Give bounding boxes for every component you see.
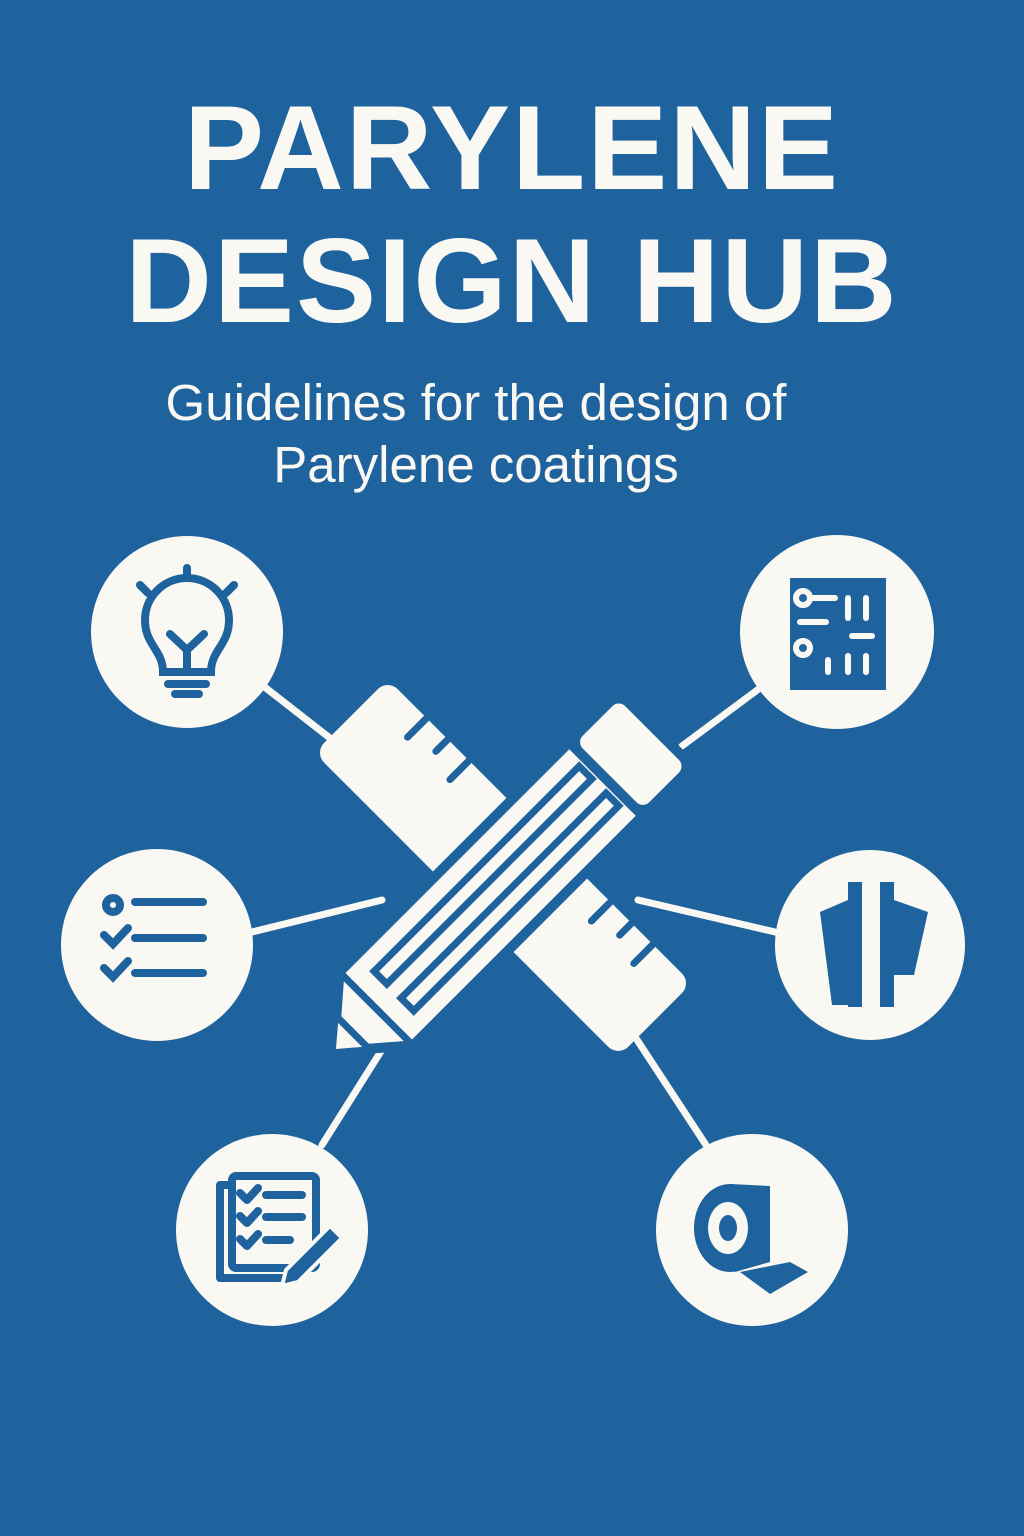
icon: circuit board <box>740 535 934 729</box>
icon: checklist <box>61 849 253 1041</box>
title <box>125 81 899 348</box>
subtitle: Parylene coatings <box>273 436 679 493</box>
icon: tape roll <box>656 1134 848 1326</box>
title: DESIGN HUB <box>125 214 899 348</box>
subtitle: Guidelines for the design of <box>166 374 786 431</box>
icon: document with pencil <box>176 1134 368 1326</box>
connector lines <box>252 685 775 1145</box>
icon: lightbulb <box>91 536 283 728</box>
icon: pencil <box>297 693 692 1088</box>
title: PARYLENE <box>184 81 840 215</box>
subtitle <box>166 374 786 493</box>
icon: caliper <box>775 850 965 1040</box>
icon: ruler <box>314 679 692 1057</box>
